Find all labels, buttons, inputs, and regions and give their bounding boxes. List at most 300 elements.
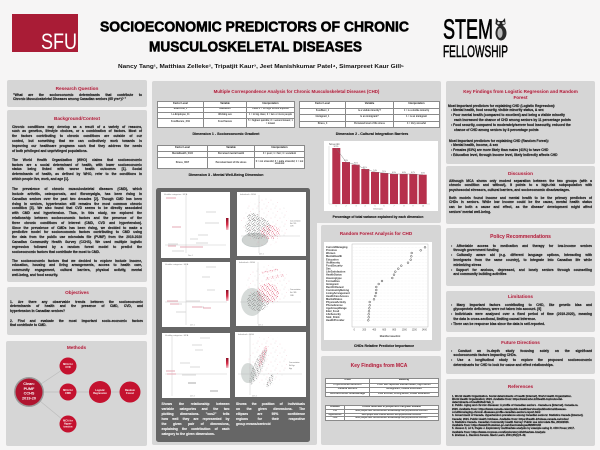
circle: MCA for hypertension xyxy=(60,416,76,432)
plot: variable categories dim 1-2: Variable categories - MCA xyxy=(164,193,188,196)
chart: variable importance dot plot: MeanDecreaseGini xyxy=(380,336,401,338)
text: limitations bullets: • Many important factors contributing to CHD, like genetic bias and xyxy=(451,303,592,307)
text: background paragraph 4: well-being, and food security. xyxy=(12,273,58,277)
text: discussion paragraph 1: Although MCA shows only modest separation between the two groups (with a xyxy=(449,179,592,183)
text: individuals plot explanation xyxy=(236,402,305,426)
authors: Nancy Tang¹, Matthias Zelleke², Tripatjit Kaur³, Jeet Manishkumar Patel⁴, Simarpreet Kaur Gill⁵ xyxy=(118,64,405,70)
panel: factor maps xyxy=(156,188,310,442)
chart: variable importance dot plot: LivingArrangement xyxy=(326,291,350,295)
chart: variable importance dot plot: HealthStatus xyxy=(326,273,342,277)
circle: MCA for CMD: CMD xyxy=(65,392,71,395)
bar chart: variance explained: 5 xyxy=(374,206,376,208)
table: dimension 2: 1 = is an immigrant xyxy=(406,116,427,118)
text: policy bullets: • Affordable access to medication and therapy for low-income seniors xyxy=(451,244,592,248)
circle: MCA for hypertension: MCA for xyxy=(63,420,73,422)
circle: logistic regression: Regression xyxy=(93,392,107,395)
table: dimension 3: Stress_0/4/7 xyxy=(176,162,189,164)
circle: MCA for hypertension: Hyper- xyxy=(64,422,72,426)
bar chart: variance explained xyxy=(324,141,438,211)
circle: MCA for CVD: MCA for xyxy=(63,363,73,366)
text: limitations bullets: • Individuals were analysed over a fixed period of time (2019-2020), meaning xyxy=(451,312,592,316)
chart: variable importance dot plot: Phonelicense xyxy=(326,303,343,307)
table: dimension 1: 5 = highest quintile; 3 = second lowest; 1 = lowest xyxy=(248,120,293,125)
table: dimension 2: 1 = is a visible minority xyxy=(404,110,429,112)
chart: variable importance dot plot: 200 xyxy=(362,330,367,332)
text: policy bullets: • Culturally aware aid (e.g. different language options, interacting with xyxy=(451,253,592,257)
plot: variable categories dim 1-3: Variable categories - MCA xyxy=(165,263,189,266)
text: future bullets xyxy=(451,349,592,368)
plot: individuals dim 2-3: Individuals - MCA xyxy=(238,333,254,336)
circle: logistic regression: Logistic xyxy=(95,389,105,392)
plot: variable categories dim 1-3: Dim 1 xyxy=(190,324,195,326)
table: disease traits: Hypertension xyxy=(329,414,341,416)
panel: multiple correspondence analysis xyxy=(152,81,441,445)
bar chart: variance explained: 1 xyxy=(336,206,337,208)
bar chart: variance explained: 4 xyxy=(364,206,366,208)
table: dimension 1 xyxy=(157,101,295,128)
text: individuals plot explanation: on the given dimensions. The xyxy=(236,406,305,410)
text: background paragraph 3: the data from the public use microdata file (PUMF) from the 2019-2020 xyxy=(12,235,142,239)
text: policy bullets: and community building activities xyxy=(453,272,507,276)
text: future bullets: determinants for CHD to look for cause and effect relationships. xyxy=(453,363,554,367)
text: variable plot explanation: variable categories and the two xyxy=(162,406,230,410)
panel: policy recommendations xyxy=(446,228,595,286)
text: background paragraph 4 xyxy=(12,259,142,278)
bar chart: variance explained: 6.9% xyxy=(392,172,396,174)
text: background paragraph 3: include arthritis, osteoporosis, and fibromyalgia, has been rising in xyxy=(12,192,142,196)
text: future bullets: socioeconomic factors impacting CHDs. xyxy=(453,353,517,357)
plot: individuals dim 1-2: Individuals - MCA xyxy=(240,193,256,196)
heading: background: Background/Context xyxy=(54,116,100,120)
text: background paragraph 4: community engagement, cultural barriers, physical activity, mental xyxy=(12,268,142,272)
bar chart: variance explained: 8 xyxy=(404,206,405,208)
table: dimension 3: Variable xyxy=(226,146,236,149)
text: logistic regression findings: • Mental health, food security, visible minority status, & sex xyxy=(451,108,544,112)
panel: objectives xyxy=(7,287,147,335)
table: dimension 2: Interpretation xyxy=(408,102,425,105)
heading: methods: Methods xyxy=(67,344,86,350)
text: policy bullets: immigrants from the same country), to integrate into Canadian life while xyxy=(453,258,592,262)
circle: random forest: Forest xyxy=(126,392,134,395)
plot: variable categories dim 2-3: Dim 2 xyxy=(190,396,195,398)
panel: key findings from logistic regression and random forest xyxy=(446,81,595,164)
text: references list: World Health Organization; 2024. Available from: https://www.who.int/health-topics/social- xyxy=(452,398,563,401)
table: disease traits: CVD xyxy=(333,410,337,412)
chart: variable importance dot plot: AgeGroupRange xyxy=(326,306,347,310)
text: references list: 2. Public. Aging and chronic diseases: A profile of Canadian seniors - Canada.ca [Internet]. Canada.ca. xyxy=(452,404,578,407)
text: background paragraph 2 xyxy=(12,158,142,182)
chart: variable importance dot plot: Immigrant xyxy=(326,282,339,286)
bar chart: variance explained: 9.9% xyxy=(344,160,348,162)
bar chart: variance explained: Scree plot xyxy=(329,143,340,146)
caption: dimension 3: Dimension 3 - Mental Well-Being Dimension xyxy=(189,172,263,176)
table: traits and meaning: Immigrants, Visible minorities xyxy=(386,388,422,390)
text: variable plot explanation xyxy=(162,402,230,436)
chart: variable importance dot plot: 800 xyxy=(392,330,397,332)
text: references list xyxy=(452,394,584,437)
plot: variable categories dim 1-2 xyxy=(161,192,230,258)
text: logistic regression findings xyxy=(448,104,571,132)
text: variable plot explanation: category to the given dimensions. xyxy=(162,432,215,436)
chart: variable importance dot plot xyxy=(324,242,432,340)
title: MUSCULOSKELETAL DISEASES xyxy=(149,38,362,56)
chart: variable importance dot plot: CurrentManaging xyxy=(326,245,348,249)
chart: variable importance dot plot: VisMinority xyxy=(326,261,340,265)
table: traits and meaning: Socioeconomic disadvantage xyxy=(330,392,365,395)
chart: variable importance dot plot: 0 xyxy=(354,330,356,332)
text: discussion paragraph 1: psychosocial stressors, cultural barriers, and socioeconomic disadvantages. xyxy=(449,188,570,192)
text: random forest findings xyxy=(449,139,558,158)
text: background paragraph 1: such as genetics, lifestyle choices, or a combination of factors. Most of xyxy=(12,129,142,133)
table: dimension 3: Perceived mental health xyxy=(218,153,244,155)
text: background paragraph 1: improving our healthcare programs such that they address the needs xyxy=(12,144,142,148)
text: logistic regression findings: • Food security, compared to moderately/severe food insecurity, reduced the xyxy=(451,123,571,127)
text: background paragraph 3: predictive model for socioeconomic factors contributing to CMD using xyxy=(12,230,142,234)
heading: limitations: Limitations xyxy=(508,294,533,298)
circle: MCA for CMD: MCA for xyxy=(63,389,73,392)
text: random forest findings: • Females (63%) are more likely than males (41%) to have CHD xyxy=(451,148,548,152)
chart: variable importance dot plot: HealthCareAccess xyxy=(326,294,349,298)
table: disease traits: CMD xyxy=(333,417,337,419)
circle: data source: 2019-20 xyxy=(22,396,36,400)
table: dimension 3: Factor Level xyxy=(175,146,190,149)
chart: variable importance dot plot: HealthProvider xyxy=(326,318,344,322)
text: background paragraph 2: status being linked with worse health outcomes [1]. Social xyxy=(12,167,142,171)
table: dimension 1: Educ3.cat_1 xyxy=(174,108,187,110)
text: logistic regression findings: • Poor mental health (compared to excellent) and being a visible minority xyxy=(451,113,565,117)
bar chart: variance explained: 9.1% xyxy=(354,162,358,164)
text: background paragraph 4: education, housing and living arrangements, access to health care, xyxy=(12,263,142,267)
table: dimension 2: Stress_4 xyxy=(318,123,327,125)
plot: individuals dim 1-2 xyxy=(237,192,306,256)
heading: random forest: Random Forest Analysis for CHD xyxy=(340,230,412,236)
panel: random forest xyxy=(321,225,441,351)
text: variable plot explanation: Shows the relationship between xyxy=(162,402,230,406)
text: policy bullets xyxy=(451,244,592,276)
chart: variable importance dot plot: FoodSecurity xyxy=(326,264,343,268)
STEM Fellowship logo xyxy=(443,14,508,60)
table: dimension 2: FoodServ_1 xyxy=(316,110,329,112)
table: dimension 1: 1 = in big class; 2 = two or more people xyxy=(249,114,292,116)
table: dimension 1: Food Secure xyxy=(218,121,232,123)
table: dimension 2: Is an immigrant? xyxy=(360,116,379,118)
panel: limitations xyxy=(446,291,595,332)
text: background paragraph 1 xyxy=(12,125,142,154)
text: policy bullets: minimizing stress xyxy=(453,263,481,267)
bar chart: variance explained: 8.1% xyxy=(363,167,367,169)
text: references list: conditions/aging-chronic-diseases-profile-canadian-seniors-report.html xyxy=(452,411,540,414)
text: variable plot explanation: explaining the contribution of each xyxy=(162,426,230,430)
plot: individuals dim 2-3: No Hyp xyxy=(289,365,295,367)
text: policy bullets: through government funding xyxy=(453,248,499,252)
heading: references: References xyxy=(508,384,533,388)
text: background paragraph 1: Chronic conditions may develop as a result of a variety of reasons, xyxy=(12,125,142,129)
text: discussion paragraph 2: can be both a cause and effect, as the disease' development might affect xyxy=(449,205,592,209)
text: random forest findings: Most important predictors for explaining CHD (Random Forest): xyxy=(449,139,549,143)
heading: research question: Research Question xyxy=(56,86,98,90)
text: variable plot explanation: plotting dimensions. "cos2" tells xyxy=(162,412,230,416)
methods flow diagram xyxy=(14,358,140,432)
chart: variable importance dot plot: CommunityBelong xyxy=(326,288,349,292)
heading: objectives: Objectives xyxy=(65,290,89,294)
text: references list: Available from: https://www.crcpress.com/Exploratory-Multivariate-Analysis xyxy=(452,431,546,434)
table: dimension 3: 0 = not stressful; 3 = quite stressful; 1 = not stressful xyxy=(256,161,303,165)
circle: random forest: Random xyxy=(125,389,136,392)
chart: variable importance dot plot: LifeSecurity xyxy=(326,312,341,316)
text: logistic regression findings: Most important predictors for explaining CHD (Logistic Regression): xyxy=(448,104,555,108)
text: objective 2 xyxy=(10,319,143,327)
chart: variable importance dot plot: 600 xyxy=(382,330,387,332)
text: references list: 1. World Health Organization. Social determinants of health [Internet]. World Health Organization. xyxy=(452,394,572,398)
text: background paragraph 3: relationship between socioeconomic factors and the presence of the xyxy=(12,216,142,220)
bar chart: variance explained: 7 xyxy=(394,206,395,208)
text: background paragraph 3: with CMD and hypertension. Thus, in this study, we explored the xyxy=(12,211,142,215)
table: dimension 2 xyxy=(299,101,440,128)
text: discussion paragraph 1 xyxy=(449,179,592,192)
plot: variable categories dim 1-3 xyxy=(162,262,230,327)
text: policy bullets: • Support for anxious, depressed, and lonely seniors through counselling xyxy=(451,268,592,272)
bar chart: variance explained: 9 xyxy=(412,206,414,208)
table: disease traits: Most people have socioeconomic disadvantage and psychosocial stressors xyxy=(355,417,428,419)
chart: variable importance dot plot: 1400 xyxy=(422,330,428,332)
plot: individuals dim 1-3: No CMD xyxy=(290,292,297,294)
table: traits and meaning: Psychosocial stressors xyxy=(334,383,361,386)
table: traits and meaning xyxy=(325,378,439,397)
heading: discussion: Discussion xyxy=(508,170,533,176)
text: individuals plot explanation: group means/centroid xyxy=(236,422,271,426)
chart: variable importance dot plot: PhysicalActivity xyxy=(326,300,346,304)
table: dimension 3: 0 = poor; 1 = fair; 4 = excellent xyxy=(263,153,296,155)
circle: MCA for CVD xyxy=(60,358,76,374)
chart: variable importance dot plot: Province xyxy=(326,248,338,252)
text: background paragraph 1: control, but something that we can collectively work towards is xyxy=(12,139,142,143)
circle: data source: CCHS xyxy=(24,392,35,396)
circle: random forest xyxy=(120,382,140,402)
text: discussion paragraph 1: chronic condition and without), it points to a high-risk subpopulation with xyxy=(449,183,592,187)
chart: variable importance dot plot: Edel_Food xyxy=(326,309,340,313)
table: dimension 2: Factor Level xyxy=(315,102,330,105)
caption: dimension 2: Dimension 2 - Cultural Integration Barriers xyxy=(336,132,408,136)
bar chart: variance explained: 6 xyxy=(384,206,385,208)
text: background paragraph 3 xyxy=(12,187,142,254)
table: dimension 1: Factor Level xyxy=(173,102,188,105)
text: background paragraph 3: Since the prevalence of CMDs has been rising, we decided to make a xyxy=(12,226,142,230)
text: background paragraph 3: The prevalence of chronic musculoskeletal diseases (CMD), which xyxy=(12,187,142,191)
table: traits and meaning: Meaning xyxy=(399,378,409,381)
plot: variable categories dim 2-3 xyxy=(162,333,230,398)
chart: variable importance dot plot: 400 xyxy=(372,330,377,332)
table: dimension 1: Interpretation xyxy=(262,102,279,105)
circle: MCA for CVD: CVD xyxy=(65,366,71,369)
text: background paragraph 1: the factors contributing to chronic conditions are outside of our xyxy=(12,134,142,138)
chart: variable importance dot plot: MentalHealth xyxy=(326,254,343,258)
text: limitations bullets: • There can be response bias since the data is self-reported. xyxy=(451,322,545,326)
text: background paragraph 4: The socioeconomic factors that we decided to explore include income, xyxy=(12,259,142,263)
bar chart: variance explained: 6.8% xyxy=(402,172,406,174)
table: traits and meaning: Poor self-reported mental health, high stress xyxy=(377,383,431,386)
caption: variance: Percentage of total variance explained by each dimension xyxy=(333,214,423,218)
chart: variable importance dot plot: MaritalStatus xyxy=(326,297,343,301)
plot: individuals dim 1-2: No CVD xyxy=(290,223,297,225)
text: discussion paragraph 2 xyxy=(449,196,592,214)
heading: MCA: Multiple Correspondence Analysis for Chronic Musculoskeletal Diseases (CHD) xyxy=(214,88,379,94)
chart: variable importance dot plot: 1200 xyxy=(412,330,418,332)
chart: variable importance dot plot: Sex xyxy=(326,267,331,271)
text: background paragraph 3: rising in seniors, hypertension still remains the most common chronic xyxy=(12,202,142,206)
circle: data source xyxy=(14,377,44,407)
heading: key findings: Forest xyxy=(513,94,528,100)
table: traits and meaning: Traits xyxy=(344,378,351,381)
text: objective 1: hypertension in Canadian seniors? xyxy=(10,309,65,313)
text: research question xyxy=(13,93,142,102)
text: references list: 4. Statistics Canada. Canadian Community Health Survey: Public use microdata file, 2019/2020. xyxy=(452,421,569,424)
panel: references xyxy=(446,379,595,446)
chart: variable importance dot plot: LifeSatisfaction xyxy=(326,270,346,274)
table: dimension 3 xyxy=(157,145,305,169)
panel: background xyxy=(7,110,147,282)
table: traits and meaning: Low income, Living alone, Lower education xyxy=(378,392,430,395)
table: dimension 1: Working sex xyxy=(218,114,232,116)
text: references list: 6. Breiman L. Random forests. Mach Learn. 2001;45(1):5–32. xyxy=(452,434,526,437)
table: dimension 2: Is a visible minority? xyxy=(358,110,381,112)
heading: policy: Policy Recommendations xyxy=(490,234,551,240)
table: dimension 1: Variable xyxy=(220,102,230,105)
text: variable plot explanation: the given pair of dimensions, xyxy=(162,422,230,426)
text: individuals plot explanation: regions for their respective xyxy=(236,416,305,420)
table: dimension 2: Variable xyxy=(365,102,374,105)
chart: variable importance dot plot: Women xyxy=(326,251,336,255)
text: random forest findings: • Education level, through income level, likely indirectly affects CHD xyxy=(451,153,558,157)
text: logistic regression findings: each increased the chance of CHD among seniors by 11 percentage points xyxy=(454,118,571,122)
circle: logistic regression xyxy=(89,381,111,403)
text: background paragraph 3: socioeconomic factors that contribute the most to CMD. xyxy=(12,250,100,254)
bar chart: variance explained: 10 xyxy=(422,206,424,208)
text: background paragraph 2: The World Health Organization (WHO) claims that socioeconomic xyxy=(12,158,142,162)
chart: variable importance dot plot: RentOrOwned xyxy=(326,285,344,289)
text: limitations bullets xyxy=(451,303,592,326)
text: research question: "What are the socioeconomic determinants that contribute to xyxy=(13,93,142,97)
panel: future directions xyxy=(446,337,595,374)
title xyxy=(100,18,409,56)
table: dimension 1: FoodSecure_3/11 xyxy=(171,121,190,123)
panel: research question xyxy=(7,80,147,107)
plot: individuals dim 1-2: Dim 1 xyxy=(259,254,264,256)
text: references list: 2020. Available from: https://www.canada.ca/en/public-health/services/publications/diseases- xyxy=(452,408,567,411)
bar chart: variance explained: 6.7% xyxy=(411,172,415,174)
table: dimension 1: Education xyxy=(219,108,231,110)
text: logistic regression findings: chance of CHD among seniors by 8 percentage points xyxy=(454,128,539,132)
text: background paragraph 2: which people live, work, and age [1]. xyxy=(12,177,69,181)
heading: future directions: Future Directions xyxy=(501,340,540,344)
table: dimension 3: MentalHealth_0/1/4 xyxy=(172,153,193,155)
table: dimension 3: Perceived level of life stress xyxy=(216,162,246,164)
text: research question: Chronic Musculoskeletal Diseases among Canadian seniors (65 yrs+)? " xyxy=(13,97,126,101)
circle: MCA for hypertension: tension xyxy=(64,426,73,428)
text: background paragraph 1: of both privileged and unprivileged populations. xyxy=(12,149,87,153)
chart: variable importance dot plot: Housingtype xyxy=(326,276,342,280)
text: future bullets: • Conduct an in-depth study focusing solely on the significant xyxy=(451,349,592,353)
table: dimension 1: Lo.Employee_11 xyxy=(171,114,190,116)
bar chart: variance explained: 3 xyxy=(356,206,357,208)
chart: variable importance dot plot: Formalities xyxy=(326,279,340,283)
caption: dimension 1: Dimension 1 - Socioeconomic Gradient xyxy=(193,132,259,136)
panel: methods xyxy=(6,341,147,446)
circle: data source: PUMF xyxy=(24,387,35,391)
header: SFU logo xyxy=(12,14,78,52)
heading: key findings: Key Findings from Logistic Regression and Random xyxy=(463,88,578,94)
text: background paragraph 2: factors are a social determinant of health, with lower socioeconomic xyxy=(12,163,142,167)
table: dimension 1: Level 1 = no high school diploma xyxy=(252,108,289,110)
plot: individuals dim 2-3 xyxy=(235,332,306,397)
table: dimension 3: Interpretation xyxy=(271,146,288,149)
table: dimension 2: Immigrant_1 xyxy=(316,116,329,118)
plot: individuals dim 1-3: Individuals - MCA xyxy=(239,261,255,264)
table: disease traits xyxy=(325,405,439,421)
chart: variable importance dot plot: Smk_Drink xyxy=(326,315,340,319)
chart: variable importance dot plot: Education xyxy=(326,258,339,262)
bar chart: variance explained: Dimensions xyxy=(373,208,383,210)
plot: individuals dim 1-3: CMD xyxy=(290,295,295,297)
text: objective 2: that contribute to CMD. xyxy=(10,323,46,327)
caption: random forest: CHDs Relative Predictor Importance xyxy=(354,344,414,348)
text: discussion paragraph 2: CHDs in seniors. While low income could be the cause, mental health status xyxy=(449,200,592,204)
text: objective 1 xyxy=(10,300,143,314)
text: random forest findings: • Mental health, income, & sex xyxy=(451,143,498,147)
circle: MCA for CMD xyxy=(60,384,76,400)
text: background paragraph 3: Canadian Community Health Survey (CCHS). We used multiple logistic xyxy=(12,240,142,244)
plot: variable categories dim 1-2: Dim 1 xyxy=(188,255,193,257)
text: variable plot explanation: how well they are represented by xyxy=(162,416,230,420)
text: background paragraph 3: Canadian seniors over the past two decades [2]. Though CMD has been xyxy=(12,197,142,201)
text: individuals plot explanation: Shows the position of individuals xyxy=(236,402,305,406)
text: discussion paragraph 2: Both models found income and mental health to be the primary predictors of xyxy=(449,196,592,200)
plot: variable categories dim 2-3: Variable categories - MCA xyxy=(165,334,189,337)
bar chart: variance explained: 2 xyxy=(346,206,347,208)
heading: key findings xyxy=(463,88,578,100)
text: references list: Canada; 2024. Public Health Infobase. Available from: https://health-infobase.canada.ca/ccdss/ xyxy=(452,418,569,421)
text: references list: Available from: https://www150.statcan.gc.ca/n1/en/catalogue/82M0013X xyxy=(452,424,541,427)
bar chart: variance explained: 7.1% xyxy=(382,171,386,173)
text: background paragraph 2: determinants of health, as defined by WHO, refer to the conditions in xyxy=(12,172,142,176)
text: limitations bullets: glycoprotein deficiency, were not taken into account. [6] xyxy=(453,307,541,311)
table: disease traits: Most people have socioeconomic disadvantage and psychosocial stressors xyxy=(355,410,428,412)
plot: individuals dim 1-2: CVD xyxy=(290,226,294,228)
text: discussion paragraph 2: seniors' mental well-being. xyxy=(449,210,491,214)
bar chart: variance explained: 7.4% xyxy=(373,170,377,172)
bar chart: variance explained: 16.2% xyxy=(333,146,339,148)
bar chart: variance explained: 6.6% xyxy=(421,172,425,174)
text: references list: 5. Husson F, Lê S, Pagès J. Exploratory multivariate analysis by example using R. CRC Press; 2017. xyxy=(452,427,575,430)
panel: discussion xyxy=(446,166,595,224)
text: background paragraph 3: three chronic conditions of interest (CMD, CVD and hypertension). xyxy=(12,221,142,225)
plot: individuals dim 2-3: Hyp xyxy=(289,368,292,370)
text: future bullets: • Use a longitudinal study to explore the proposed socioeconomic xyxy=(451,358,592,362)
text: references list: 3. Government of Canada. Hypertension prevalence among Canadian seniors: Statistics Canada [Internet]. xyxy=(452,414,583,417)
table: disease traits: Most people have cultural barriers and psychosocial stressors xyxy=(362,414,421,416)
circle: data source: Clean: xyxy=(23,382,35,386)
plot: individuals dim 1-2: Concentration xyxy=(290,220,301,222)
text: background paragraph 3: regression followed by a random forest model to predict the xyxy=(12,245,142,249)
text: limitations bullets: the data is cross-sectional, limiting causal inference. xyxy=(453,317,536,321)
text: individuals plot explanation: ellipses are 95% confidence xyxy=(236,412,305,416)
text: objective 1: determinants of health and the presence of CMD, CVD, and xyxy=(10,304,143,308)
text: references list: determinants-of-health#tab=tab_1 xyxy=(452,401,494,404)
heading: key findings MCA: Key Findings from MCA xyxy=(351,362,407,368)
text: objective 2: 2. Find and evaluate the most important socio-economic factors xyxy=(10,319,143,323)
table: dimension 2: Perceived level of life stress xyxy=(354,123,385,125)
table: dimension 2: 4 = Very stressful xyxy=(407,123,426,125)
table: traits and meaning: Cultural barriers xyxy=(338,388,357,390)
